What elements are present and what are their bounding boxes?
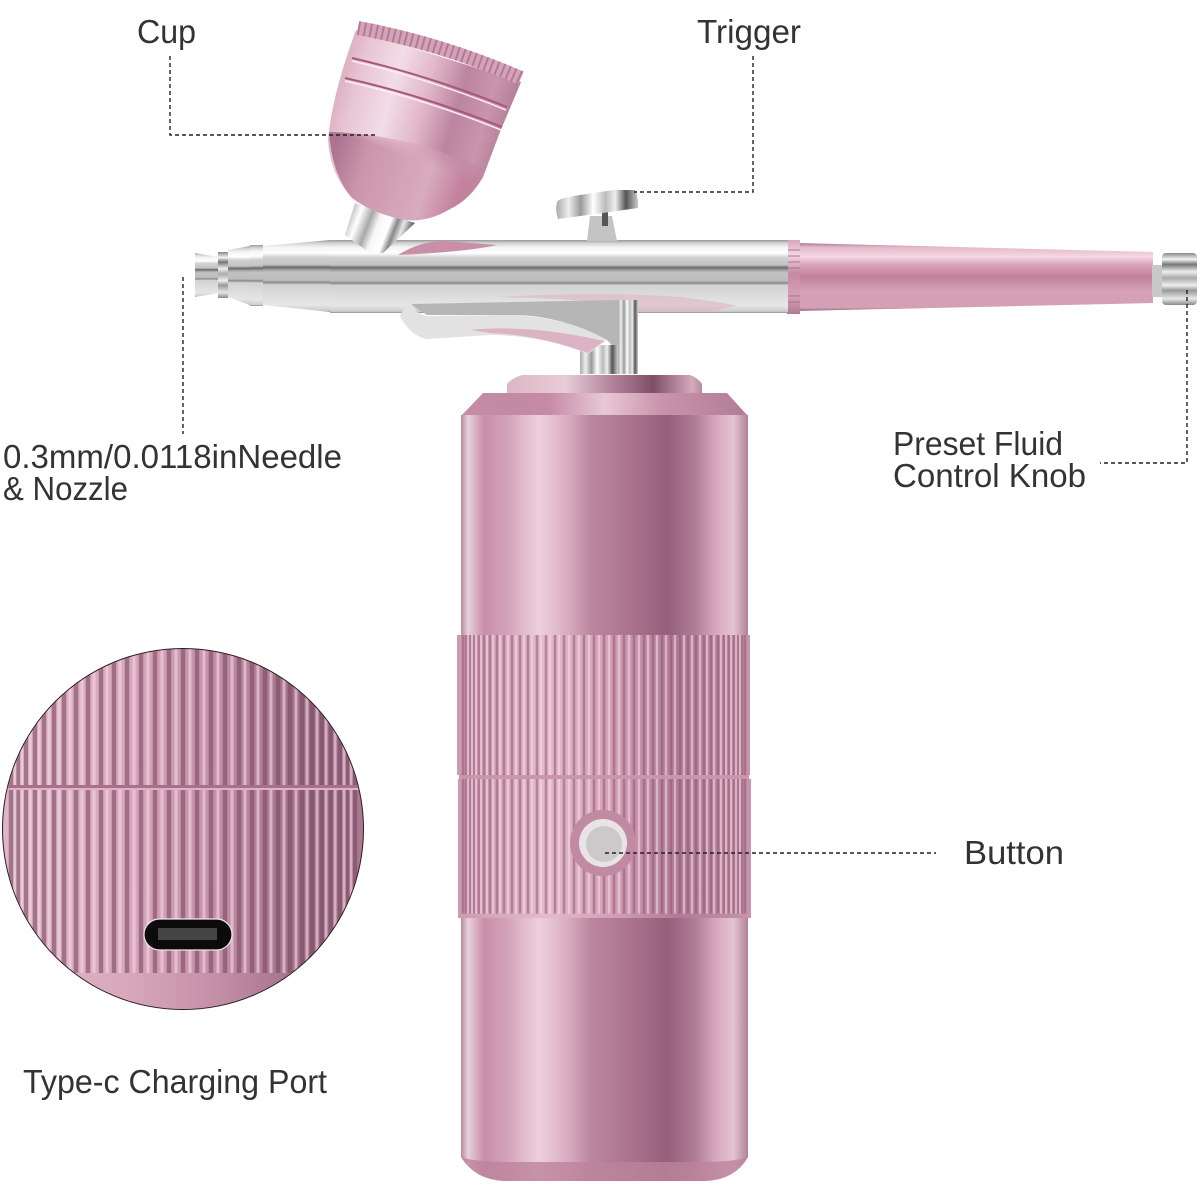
icon: usb-c port	[144, 919, 232, 950]
knurled band top	[457, 635, 750, 775]
airbrush: lower grip and stem	[400, 300, 638, 374]
label: preset fluid control knob	[893, 425, 1086, 494]
leader lines	[170, 56, 1187, 853]
label: preset fluid control knob: Preset Fluid	[893, 425, 1063, 462]
device body	[457, 375, 751, 1181]
body: lower cylinder	[461, 915, 748, 1181]
label: trigger: Trigger	[697, 13, 801, 50]
label: cup: Cup	[137, 13, 196, 50]
body: chamfered shoulder	[462, 393, 747, 415]
label: needle and nozzle: & Nozzle	[3, 470, 128, 507]
label: type-c charging port: Type-c Charging Port	[23, 1063, 327, 1100]
barrel: pink reflection bottom	[497, 294, 737, 312]
label: preset fluid control knob: Control Knob	[893, 457, 1086, 494]
barrel: pink reflection top	[398, 241, 497, 255]
label: needle and nozzle: 0.3mm/0.0118inNeedle	[3, 438, 342, 475]
cup: knurled rim	[358, 28, 521, 78]
body: upper cylinder	[461, 415, 748, 637]
label: button: Button	[964, 834, 1064, 871]
cup: lower shaded part	[329, 132, 486, 220]
icon: fluid control knob	[1152, 253, 1197, 305]
airbrush: trigger	[556, 190, 638, 241]
airbrush: nozzle	[195, 240, 330, 312]
detail circle: type-c port	[0, 640, 370, 1013]
label: needle and nozzle	[3, 438, 342, 507]
knurled band bottom	[458, 775, 751, 918]
cup: grooves	[345, 58, 507, 130]
airbrush: chrome barrel	[330, 240, 788, 313]
body: top collar	[507, 375, 702, 393]
airbrush: cup neck	[345, 203, 415, 253]
airbrush: cup	[328, 28, 521, 220]
airbrush: rear pink handle taper	[787, 240, 1153, 314]
icon: button	[570, 810, 636, 876]
